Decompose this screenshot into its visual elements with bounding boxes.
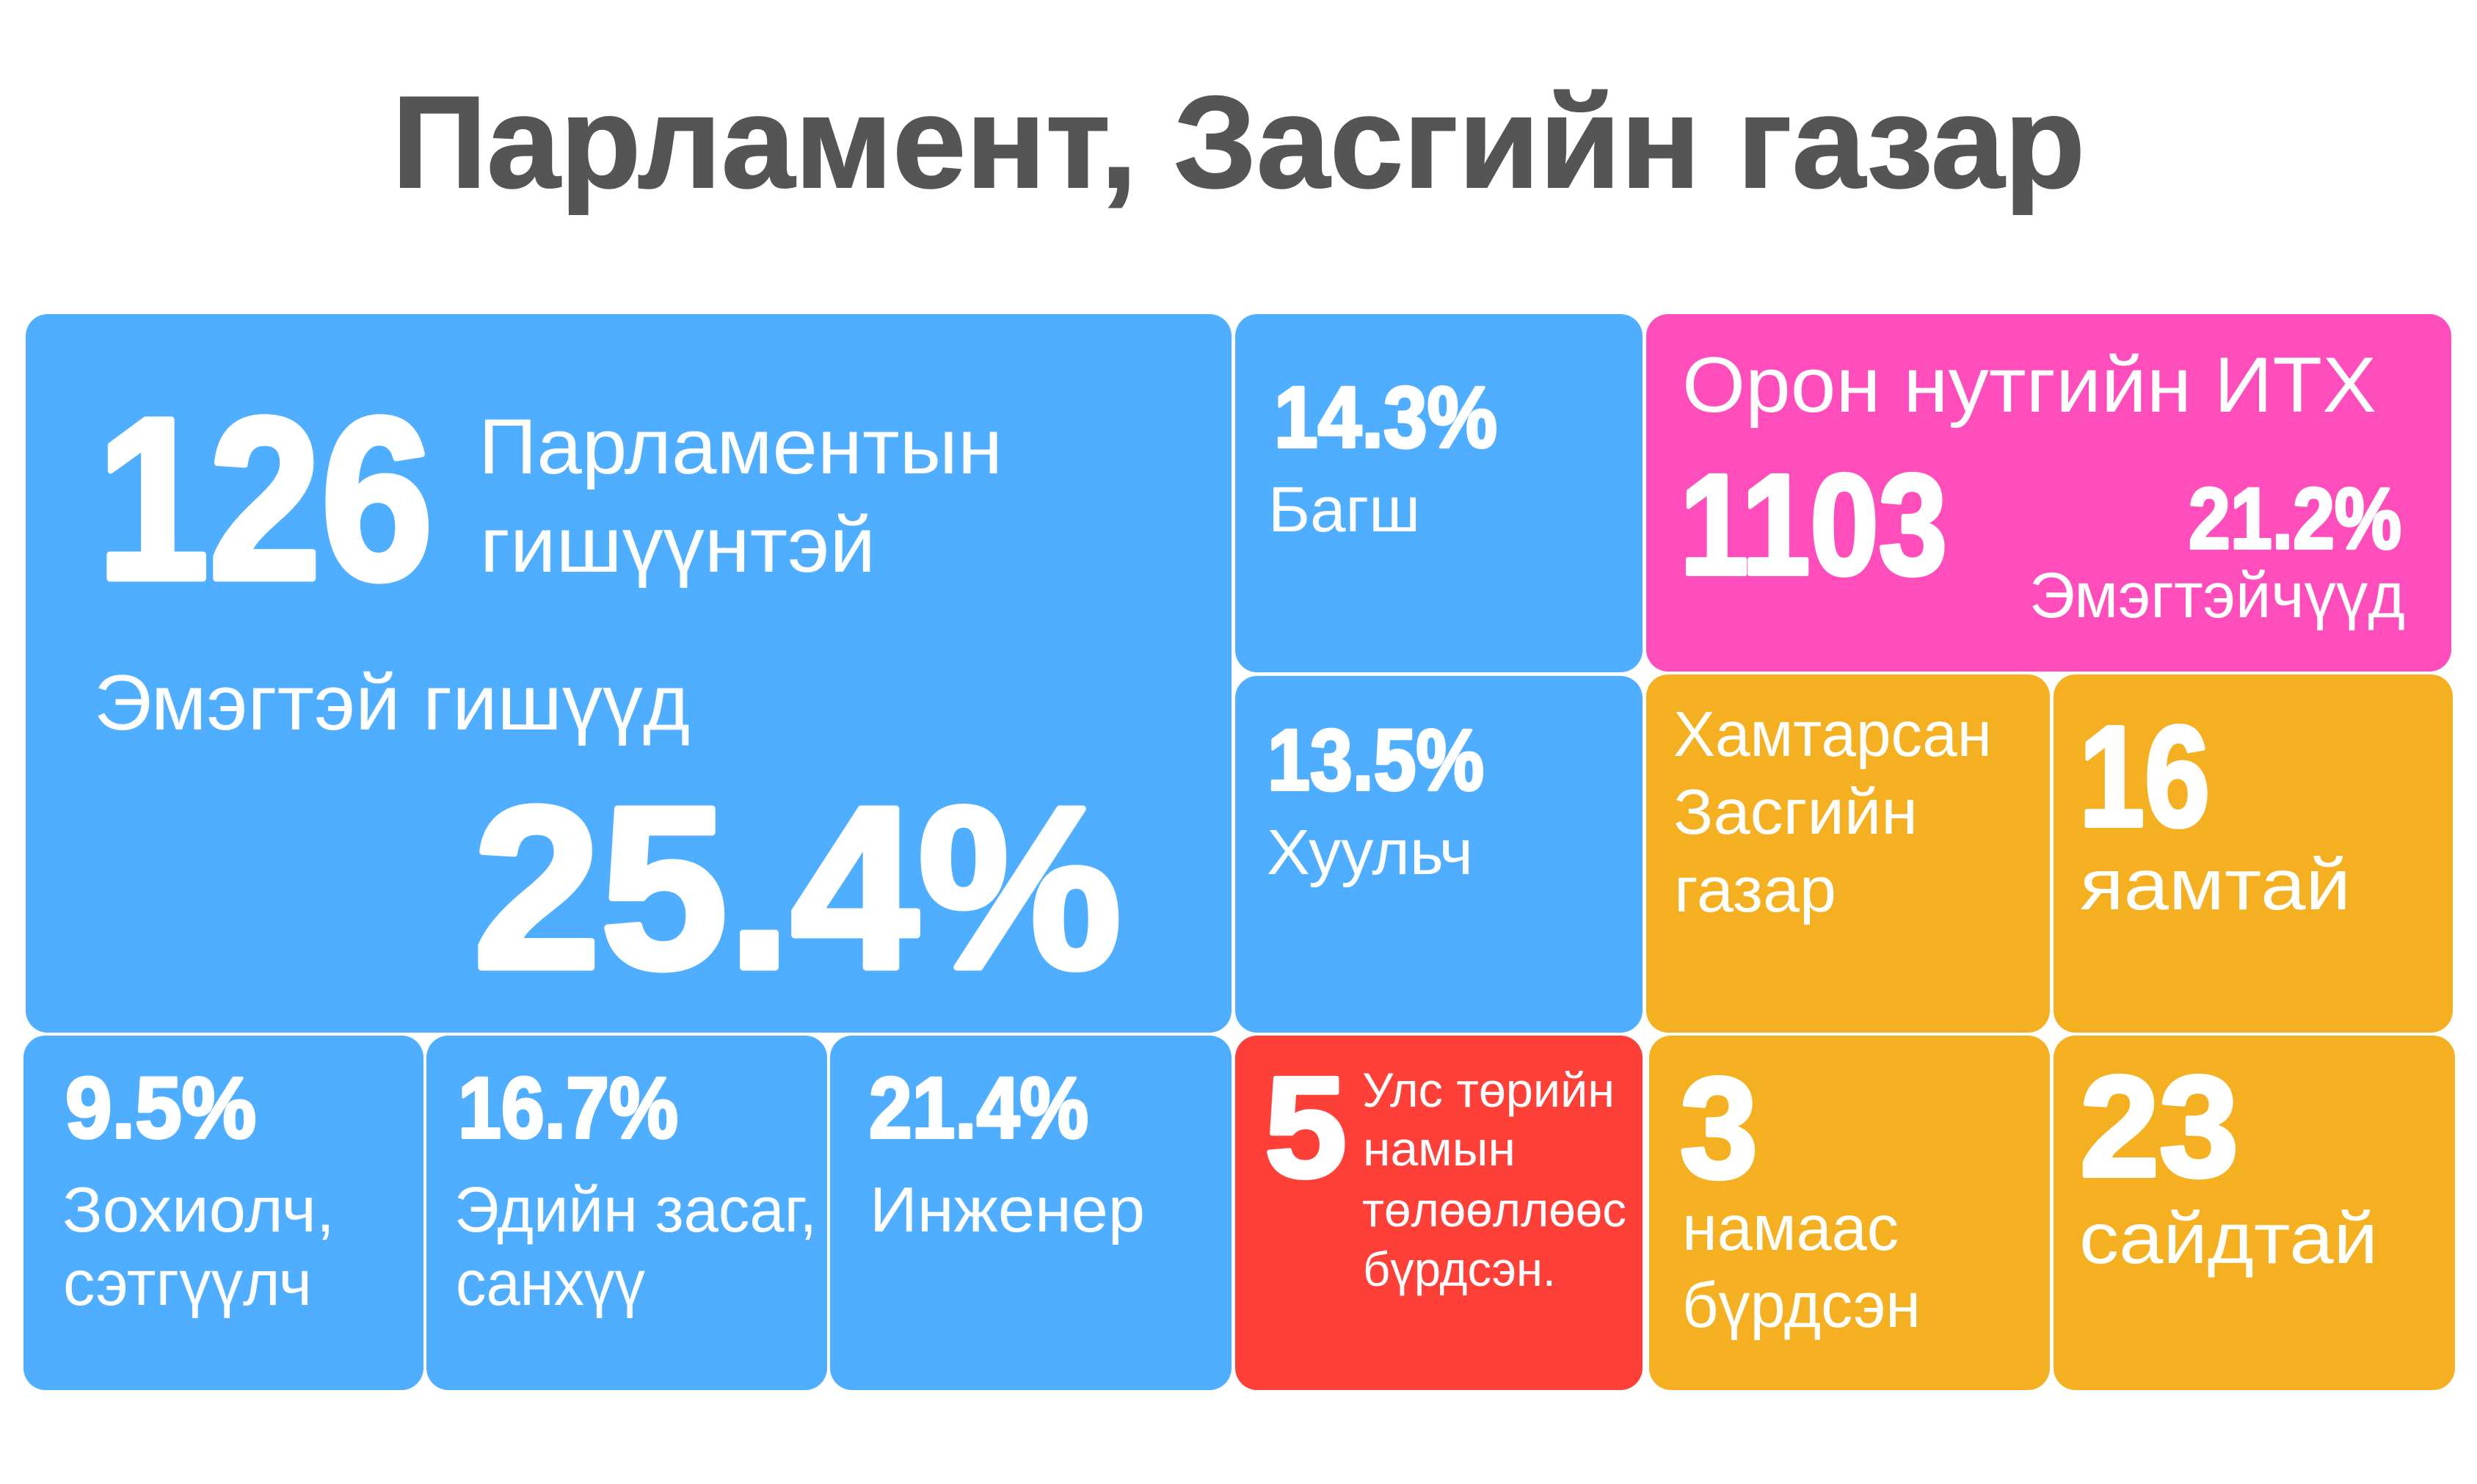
- label: line four: бүрдсэн.: [1363, 1242, 1556, 1296]
- stat: 5: 5: [1265, 1047, 1347, 1207]
- label: members line two: гишүүнтэй: [480, 501, 876, 589]
- label: writer: Зохиолч,: [62, 1174, 335, 1245]
- label: teacher: Багш: [1268, 474, 1420, 545]
- label: finance: санхүү: [456, 1248, 645, 1319]
- panel: three parties: [1649, 1036, 2050, 1390]
- stat: 25.4 percent: 25.4%: [473, 759, 1121, 1016]
- label: lawyer: Хуульч: [1267, 817, 1473, 888]
- label: economics: Эдийн засаг,: [454, 1174, 817, 1245]
- stat: 23: 23: [2080, 1047, 2238, 1207]
- label: female members: Эмэгтэй гишүүд: [94, 658, 690, 746]
- stat: 1103: 1103: [1680, 445, 1947, 605]
- stat: 21.2 percent: 21.2%: [2189, 470, 2401, 567]
- label: journalist: сэтгүүлч: [63, 1248, 312, 1319]
- label: line one: Улс төрийн: [1362, 1063, 1615, 1117]
- label: members of parliament: Парламентын: [479, 402, 1003, 490]
- title: Парламент, Засгийн газар: [392, 69, 2085, 215]
- label: engineer: Инженер: [870, 1174, 1145, 1245]
- panel: five party representatives: [1235, 1036, 1643, 1390]
- stat: 126 members: 126: [97, 370, 433, 628]
- panel: parliament: [26, 314, 1232, 1033]
- label: parties: намаас: [1682, 1193, 1899, 1264]
- panel: writer: [23, 1036, 423, 1390]
- stat: 21.4 percent: 21.4%: [869, 1060, 1088, 1157]
- label: formed: бүрдсэн: [1682, 1270, 1921, 1341]
- heading: local councils: Орон нутгийн ИТХ: [1682, 341, 2376, 429]
- label: line two: намын: [1363, 1121, 1516, 1176]
- stat: 13.5 percent: 13.5%: [1267, 712, 1484, 809]
- label: coalition line one: Хамтарсан: [1673, 699, 1992, 770]
- stat: 16.7 percent: 16.7%: [458, 1060, 678, 1157]
- panel: ministers: [2054, 1036, 2455, 1390]
- panel: economics: [426, 1036, 827, 1390]
- panel: teacher: [1235, 314, 1643, 672]
- panel: coalition government: [1646, 674, 2050, 1033]
- label: ministers: сайдтай: [2079, 1198, 2378, 1279]
- panel: local councils: [1646, 314, 2451, 672]
- stat: 14.3 percent: 14.3%: [1274, 369, 1497, 466]
- stat: 9.5 percent: 9.5%: [65, 1060, 256, 1157]
- panel: ministries: [2054, 674, 2453, 1033]
- stat: 3: 3: [1680, 1048, 1758, 1208]
- panel: lawyer: [1235, 676, 1643, 1033]
- label: coalition line two: Засгийн: [1673, 776, 1918, 848]
- label: coalition line three: газар: [1674, 854, 1836, 925]
- label: women: Эмэгтэйчүүд: [2029, 560, 2405, 631]
- label: line three: төлөөллөөс: [1362, 1182, 1626, 1237]
- panel: engineer: [830, 1036, 1232, 1390]
- label: ministries: яамтай: [2080, 844, 2351, 925]
- stat: 16: 16: [2079, 696, 2210, 856]
